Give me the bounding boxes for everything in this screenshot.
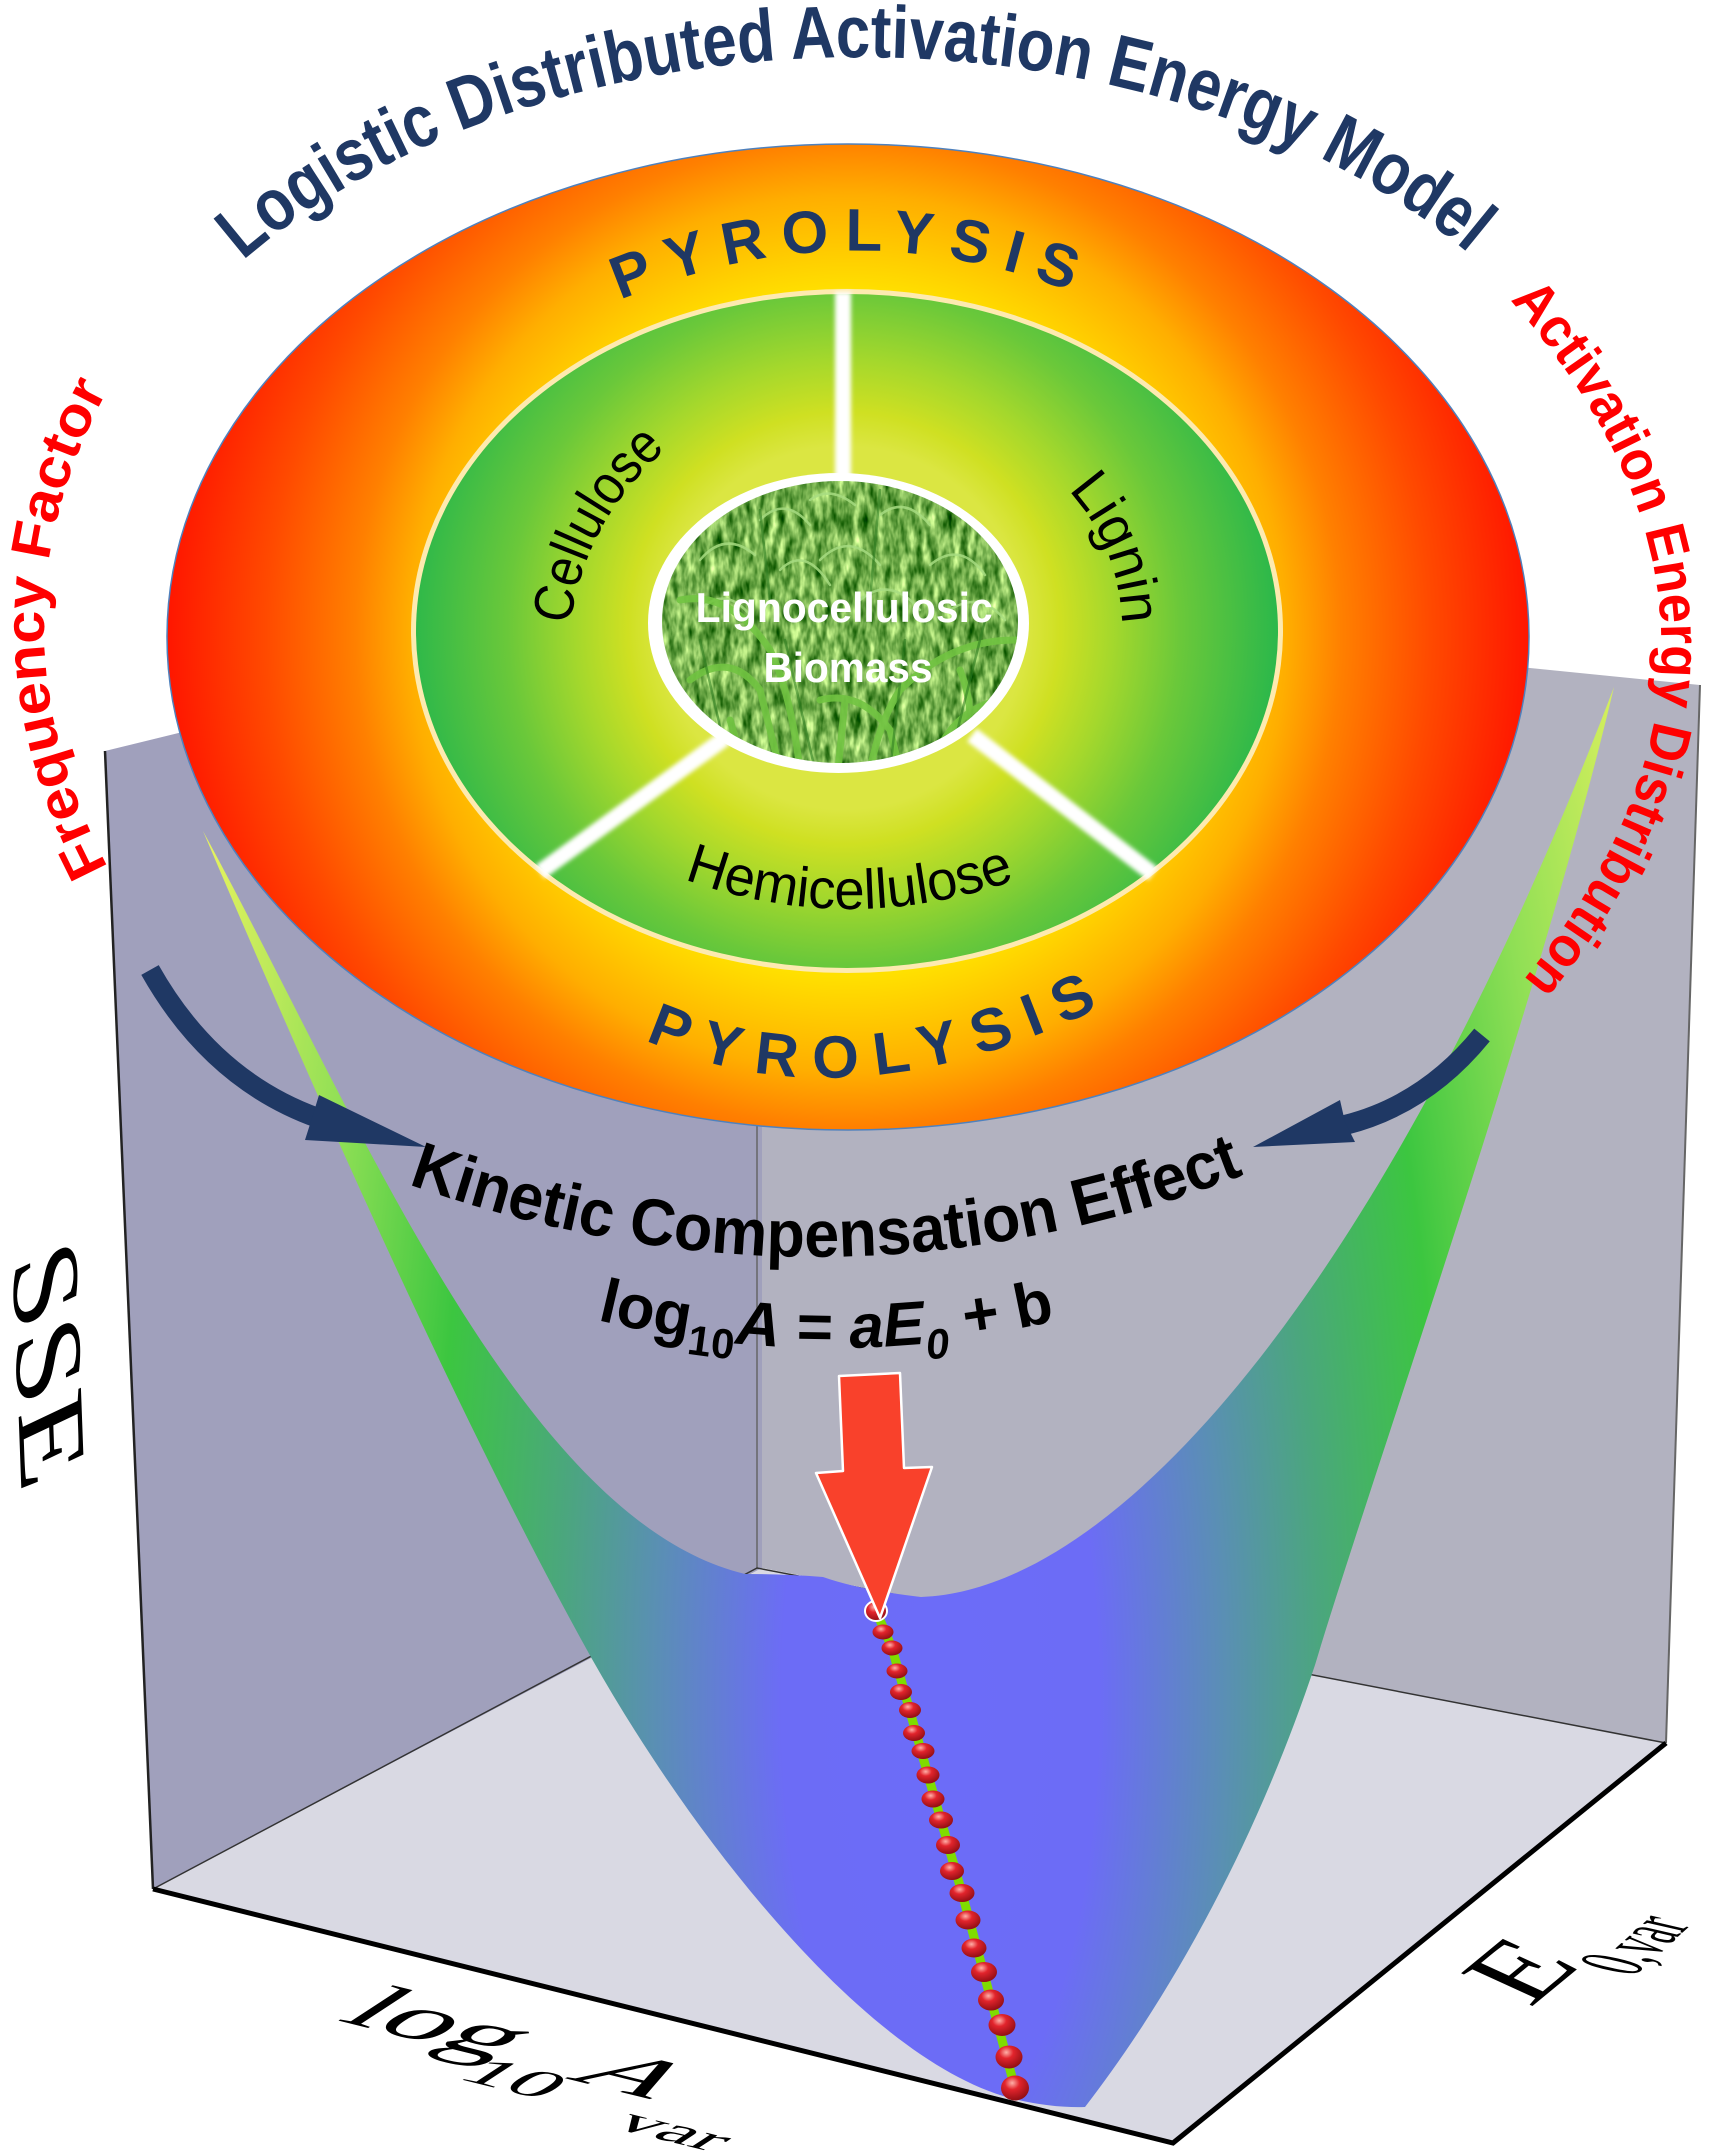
axis label: E 0,var: 0,var xyxy=(1556,1907,1710,1981)
outer pyrolysis ring xyxy=(167,144,1529,1130)
box edges xyxy=(105,685,1700,2143)
axis label: E 0,var: E xyxy=(1432,1921,1606,2019)
axis label: log10 A var: 10 xyxy=(444,2050,586,2107)
arrow: red pointing to minimum xyxy=(816,1373,932,1621)
equation: kinetic compensation: = aE xyxy=(796,1289,927,1362)
center label: Lignocellulosic Biomass: Biomass xyxy=(764,644,932,691)
panel: 3D plot box xyxy=(105,590,1700,2143)
equation: kinetic compensation: A xyxy=(732,1289,783,1361)
center label: Lignocellulosic Biomass: Lignocellulosic xyxy=(696,584,993,631)
axis label: E 0,var xyxy=(1432,1907,1710,2019)
axis label: log10 A var: A xyxy=(549,2037,713,2109)
chart: red bead minimum line xyxy=(872,1613,1029,2100)
equation: kinetic compensation: + b xyxy=(942,1267,1058,1353)
floor xyxy=(153,1568,1666,2143)
left wall xyxy=(105,590,762,1889)
equation: kinetic compensation: 10 xyxy=(688,1326,733,1358)
heading: Kinetic Compensation Effect: Kinetic Compensation Effect xyxy=(412,1137,1244,1270)
equation: kinetic compensation: log xyxy=(601,1277,831,1348)
green biomass components disk xyxy=(416,294,1278,968)
panel: concentric pyrolysis disk xyxy=(166,143,1530,1131)
label: Cellulose: Cellulose xyxy=(534,433,660,620)
right wall xyxy=(762,590,1700,1743)
axis label: log10 A var: log xyxy=(319,1975,564,2071)
label: Hemicellulose: Hemicellulose xyxy=(688,844,1010,910)
label: bottom PYROLYSIS: PYROLYSIS xyxy=(648,976,1093,1078)
inner ring halo xyxy=(411,289,1283,973)
arrow: right curved navy xyxy=(1253,1035,1482,1147)
label: Activation Energy Distribution: Activation Energy Distribution xyxy=(1511,286,1692,993)
chart: SSE parabolic surface xyxy=(203,687,1614,2107)
equation: kinetic compensation: 0 xyxy=(923,1319,952,1368)
white spokes xyxy=(540,292,1153,874)
arrow: left curved navy xyxy=(150,970,426,1147)
label: top PYROLYSIS: PYROLYSIS xyxy=(608,209,1078,298)
axis label: log10 A var xyxy=(319,1975,750,2152)
label: Lignin: Lignin xyxy=(1071,469,1158,621)
center biomass photo circle xyxy=(648,473,1029,773)
